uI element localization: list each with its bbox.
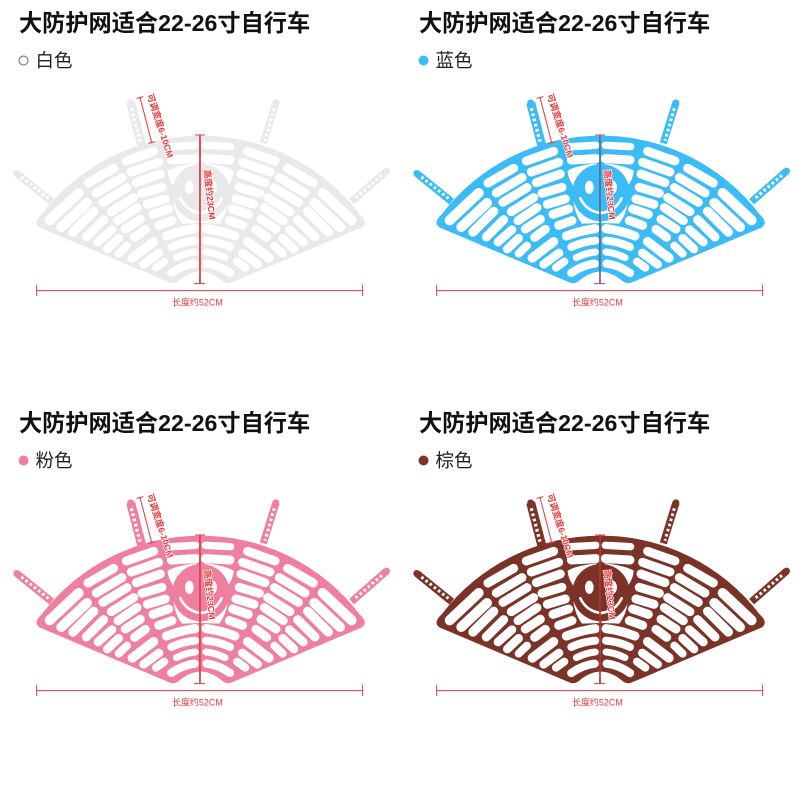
dimension annotations <box>37 492 363 707</box>
dimension annotations: 长度约52CM <box>172 296 223 307</box>
colour label: 白色 <box>36 47 73 73</box>
dimension annotations <box>37 92 363 307</box>
dimension annotations: 可调宽度6-10CM <box>545 492 576 559</box>
heading: 大防护网适合22-26寸自行车 <box>19 10 310 36</box>
dimension annotations <box>437 92 763 307</box>
panel: white variant <box>13 10 390 307</box>
dimension annotations: 长度约52CM <box>572 296 623 307</box>
dimension annotations: 高度约23CM <box>602 169 618 220</box>
dimension annotations: 长度约52CM <box>572 696 623 707</box>
colour dot: brown <box>418 456 428 466</box>
white protective net <box>13 99 390 283</box>
dimension annotations: 长度约52CM <box>172 696 223 707</box>
colour label: 棕色 <box>436 447 473 473</box>
colour label: 粉色 <box>36 447 73 473</box>
panel: blue variant <box>413 10 790 307</box>
colour dot: blue <box>418 56 428 66</box>
brown protective net <box>413 499 790 683</box>
heading: 大防护网适合22-26寸自行车 <box>419 10 710 36</box>
heading: 大防护网适合22-26寸自行车 <box>419 410 710 436</box>
colour label: 蓝色 <box>436 47 473 73</box>
blue protective net <box>413 99 790 283</box>
dimension annotations: 高度约23CM <box>202 169 218 220</box>
dimension annotations: 可调宽度6-10CM <box>145 492 176 559</box>
panel: pink variant <box>13 410 390 707</box>
dimension annotations: 可调宽度6-10CM <box>545 92 576 159</box>
dimension annotations: 高度约23CM <box>602 569 618 620</box>
colour dot: pink <box>18 456 28 466</box>
dimension annotations: 可调宽度6-10CM <box>145 92 176 159</box>
dimension annotations <box>437 492 763 707</box>
pink protective net <box>13 499 390 683</box>
heading: 大防护网适合22-26寸自行车 <box>19 410 310 436</box>
dimension annotations: 高度约23CM <box>202 569 218 620</box>
panel: brown variant <box>413 410 790 707</box>
colour dot: white <box>19 56 28 65</box>
